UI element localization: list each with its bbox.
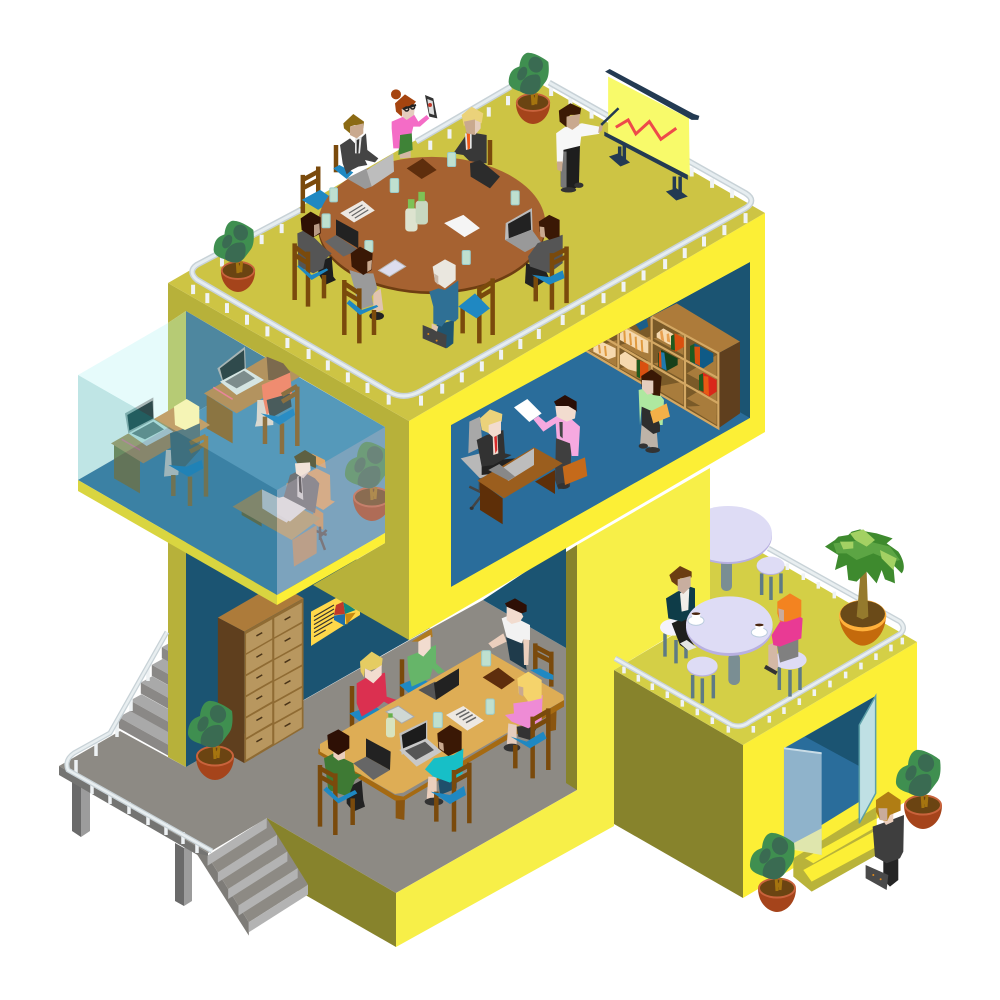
projection screen [604,69,699,201]
top table laptops and book [347,153,500,189]
glass panes [78,427,277,595]
open glass doors [784,696,876,855]
panel: glass walled office [78,311,391,605]
person: standing man in white shirt [488,598,530,670]
stool: rear [757,557,785,600]
terrace rear table [710,506,772,591]
lower room back walls [186,535,566,767]
door opening [784,696,876,847]
lower staircase [196,818,308,936]
chair: far right of table [530,643,553,687]
upper staircase [119,641,242,766]
left laptop [325,219,358,257]
person: seated man left, chair [295,212,336,307]
plant behind right glass pane [344,442,385,521]
plant: roof back corner [509,53,550,124]
terrace front table [686,596,773,685]
lower room people and meeting table [318,598,564,835]
table items [322,153,542,276]
person: seated blond worker [164,399,206,506]
round table [318,157,545,294]
person: standing man in pink shirt [514,395,587,489]
table items [353,651,515,780]
person: red shirt man and chair [349,652,397,727]
person: old man with briefcase [423,259,458,348]
bookcase [585,303,740,428]
stool: front [687,657,718,703]
office chair [460,416,488,510]
pale glass and back wall [78,323,168,427]
desk with laptop [477,447,563,524]
terrace railing [615,548,903,733]
central column and door jamb [566,468,710,826]
person: dark green shirt man and chair [320,729,365,835]
plant: terrace front [750,833,796,912]
person: seated blond man top and chair [453,107,490,165]
panel: roof terrace [168,76,765,421]
meeting table [318,651,564,820]
chair: front of old man [458,278,493,343]
big office chair [287,453,335,550]
balcony posts [72,780,192,906]
plant: roof left corner [214,221,255,292]
person: seated man in grey suit [283,450,319,513]
filing cabinet [218,583,304,763]
person: woman with tablet [391,89,437,158]
stair and balcony railing [67,632,212,853]
person: man with briefcase at door [866,792,904,890]
coffee cups [688,612,767,637]
person: seated blond man [477,409,515,475]
front base walls [267,768,614,947]
glass room floor edge [78,480,277,605]
plant: lower room [188,701,234,780]
person: seated man top left and chair [333,114,378,179]
left column [168,530,186,767]
rear desk [204,347,300,443]
person: seated woman grey dress, chair [344,247,384,343]
stool: man's seat [660,619,687,663]
person: pink shirt blonde woman and chair [504,672,548,778]
palm tree [825,529,904,646]
stool: woman's seat [773,651,807,697]
front desk [233,489,321,567]
person: teal shirt woman and chair [425,725,469,832]
person: presenter [556,103,619,193]
panel: right office room [451,262,750,587]
lower room floor [59,600,577,893]
wall poster with pie chart [311,585,360,646]
upper block walls [168,213,765,640]
front left desk [111,397,210,493]
person: woman standing with green blouse [639,369,670,453]
panel: terrace block [614,523,917,898]
person: seated orange shirt worker [255,357,297,454]
person: seated man right, chair [525,215,567,310]
entrance steps [793,807,877,892]
plant: right of door [896,750,942,829]
person: man seated on terrace [666,566,697,651]
person: green shirt man and chair [399,628,445,697]
chair: rear left [302,167,334,213]
roof railing [192,83,751,406]
person: woman seated on terrace [765,593,803,673]
